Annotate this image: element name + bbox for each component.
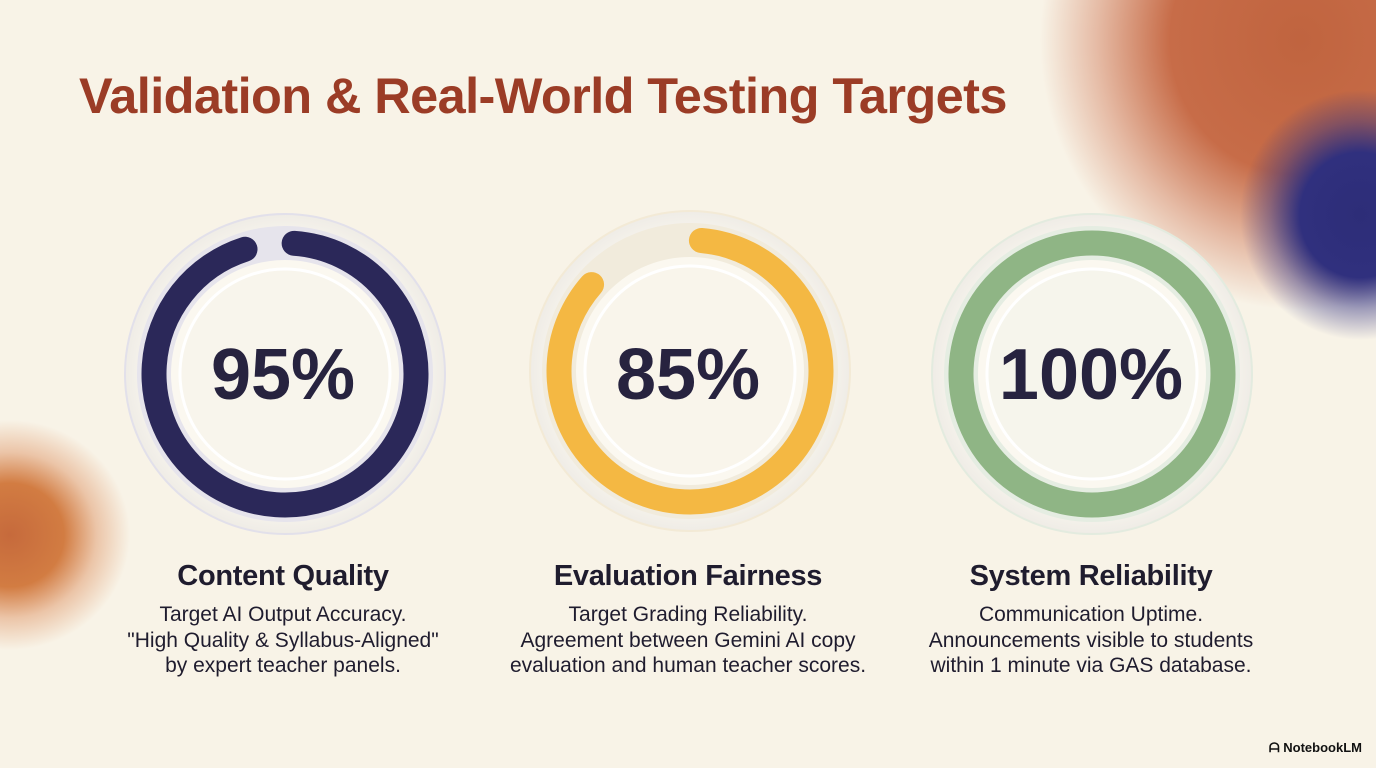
title: Validation & Real-World Testing Targets — [79, 67, 1007, 124]
text block: evaluation fairness: Target Grading Reliability. — [569, 603, 807, 626]
background blob: left orange — [0, 420, 130, 650]
value 95%: 95% — [211, 335, 355, 415]
text block: system reliability — [928, 560, 1253, 677]
brand: ᗩ NotebookLM — [1269, 740, 1362, 755]
ring: 100% system reliability — [932, 214, 1252, 534]
background blob: top right orange — [1040, 0, 1376, 310]
ring: 95% content quality — [125, 214, 445, 534]
text block: content quality: "High Quality & Syllabus-Aligned" — [127, 628, 439, 652]
text block: system reliability: System Reliability — [970, 560, 1212, 592]
text block: content quality — [127, 560, 439, 677]
text block: system reliability: within 1 minute via GAS database. — [930, 654, 1252, 677]
text block: content quality: Content Quality — [177, 560, 389, 592]
text block: system reliability: Announcements visible to students — [929, 628, 1253, 652]
ring: 85% evaluation fairness — [530, 211, 850, 531]
text block: content quality: Target AI Output Accuracy. — [159, 603, 407, 626]
text block: content quality: by expert teacher panels. — [165, 654, 401, 677]
text block: evaluation fairness: Evaluation Fairness — [554, 560, 822, 592]
text block: evaluation fairness: Agreement between Gemini AI copy — [520, 628, 856, 652]
text block: system reliability: Communication Uptime. — [979, 603, 1203, 626]
value 85%: 85% — [616, 335, 760, 415]
background blob: navy — [1240, 90, 1376, 340]
value 100%: 100% — [999, 335, 1183, 415]
text block: evaluation fairness — [510, 560, 866, 677]
text block: evaluation fairness: evaluation and human teacher scores. — [510, 654, 866, 677]
